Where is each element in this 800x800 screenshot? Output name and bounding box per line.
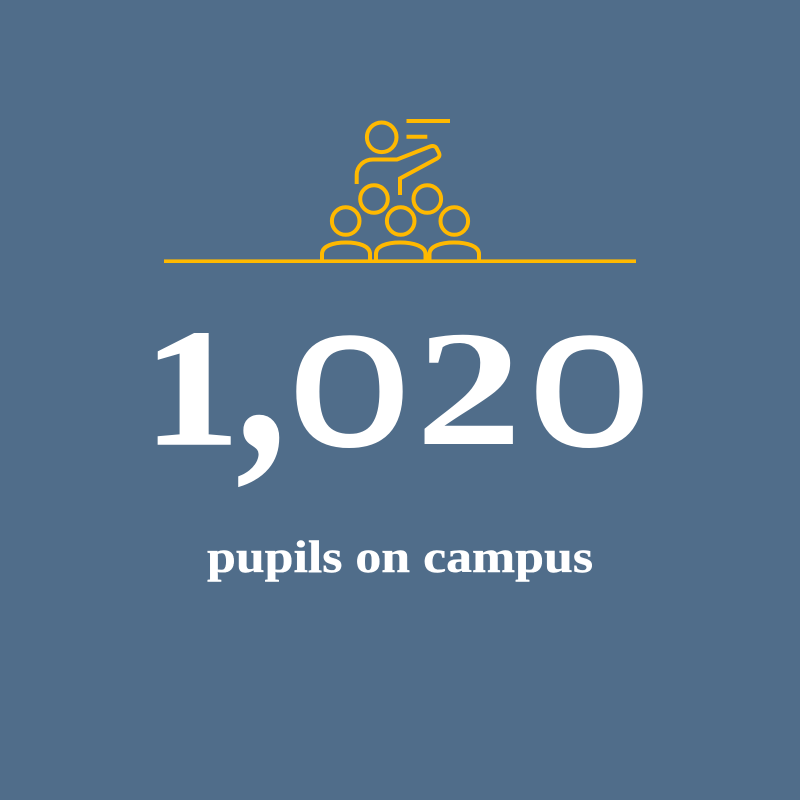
icon: teacher body and arm [357, 146, 439, 195]
icon: teacher head [367, 122, 397, 152]
divider line [164, 259, 636, 263]
icon: presentation lines [406, 121, 450, 137]
caption: pupils on campus [207, 532, 593, 582]
icon: teacher presenting to pupils [322, 121, 479, 261]
number value: 1,020: 1 [143, 296, 240, 481]
number value: 1,020 [143, 238, 649, 503]
number value: 1,020: 2 [416, 298, 522, 480]
number value: 1,020: , [236, 238, 287, 503]
icon: pupil shoulders [322, 242, 479, 261]
icon: pupil heads [332, 185, 468, 235]
number value: 1,020: 0 [530, 305, 649, 478]
number value: 1,020: 0 [290, 305, 409, 478]
